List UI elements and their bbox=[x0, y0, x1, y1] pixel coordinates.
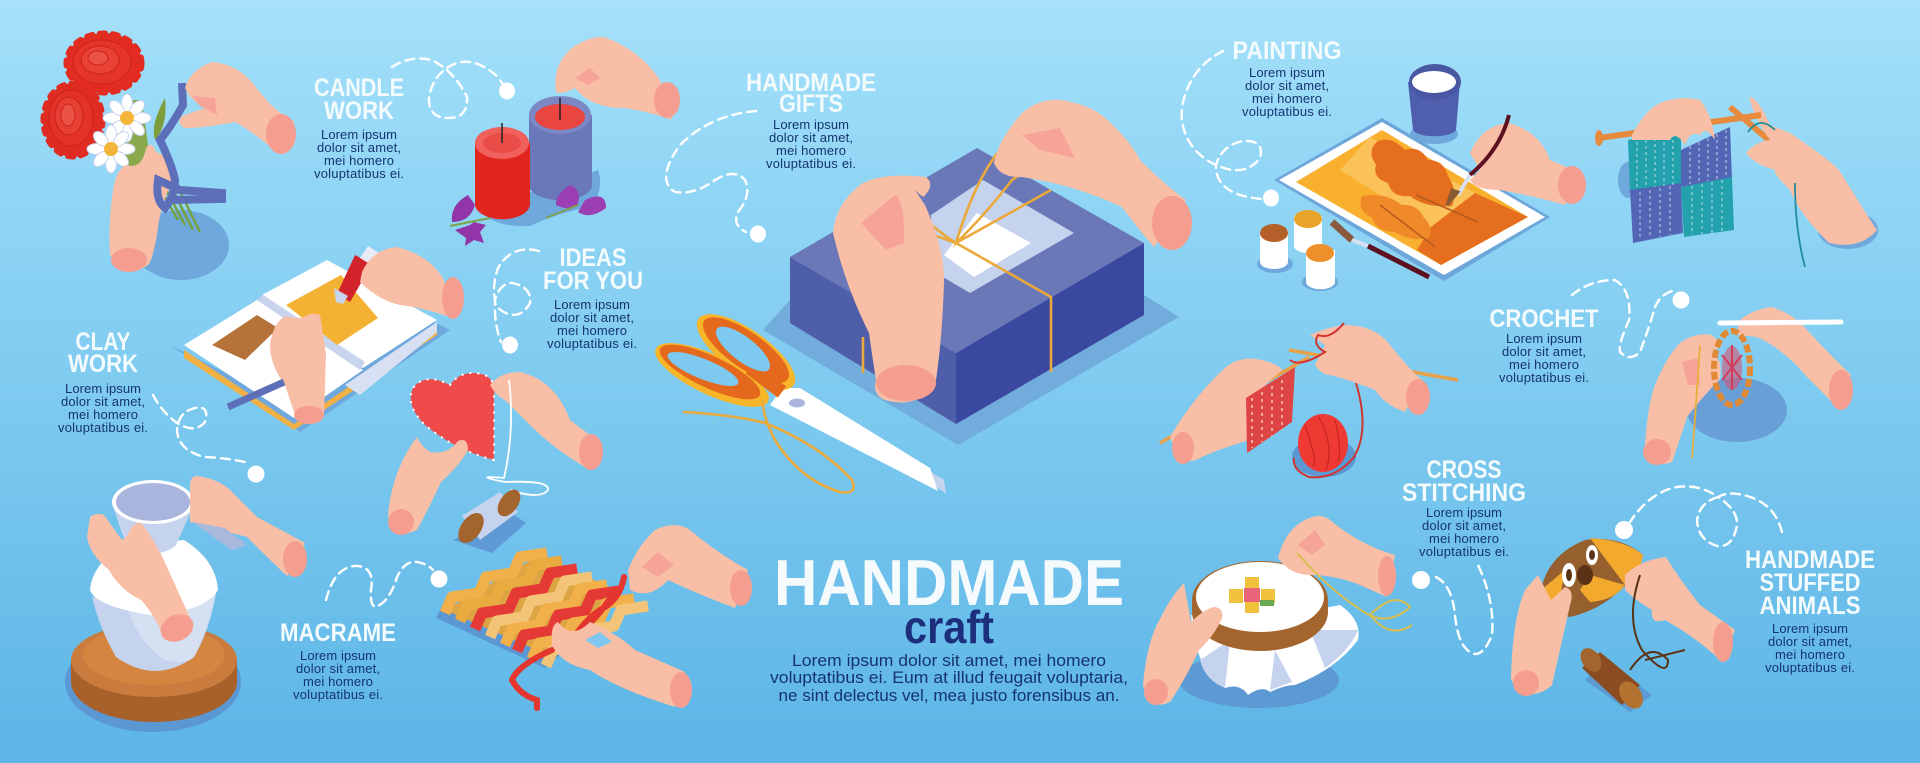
icon: small leaf bbox=[1360, 195, 1430, 239]
icon: handles bbox=[647, 301, 806, 419]
icon: box label bbox=[931, 180, 1074, 293]
hand bbox=[87, 514, 191, 640]
icon: ribbon bbox=[157, 83, 222, 208]
arrow: stuffed animals dashed bbox=[1615, 486, 1782, 546]
text block: clay work: Lorem ipsum bbox=[65, 381, 141, 396]
icon: purple flowers right bbox=[546, 185, 606, 218]
heading: ideas for you: IDEAS bbox=[560, 244, 626, 272]
heading: handmade gifts: GIFTS bbox=[779, 90, 843, 118]
text block: stuffed animals bbox=[1765, 621, 1855, 675]
text block: ideas for you: dolor sit amet, bbox=[550, 310, 634, 325]
icon: brown photo bbox=[212, 315, 278, 360]
text block: ideas for you: mei homero bbox=[557, 323, 627, 338]
icon: plush bbox=[1541, 538, 1643, 625]
icon: string bbox=[683, 400, 854, 492]
icon: red rose bbox=[66, 33, 142, 93]
heading: ideas for you: FOR YOU bbox=[543, 267, 643, 295]
heading: clay work bbox=[68, 328, 138, 378]
icon: white thread bbox=[487, 380, 548, 495]
shadow bbox=[65, 632, 241, 732]
text block: crochet: voluptatibus ei. bbox=[1499, 370, 1589, 385]
shadow bbox=[1292, 437, 1356, 477]
icon: red rose bbox=[43, 83, 103, 157]
hand bbox=[994, 100, 1186, 247]
heading: clay work: CLAY bbox=[76, 328, 131, 356]
icon: blue candle bbox=[529, 96, 592, 200]
shadow bbox=[1179, 652, 1339, 708]
text block: painting: mei homero bbox=[1252, 91, 1322, 106]
text block: stuffed animals: Lorem ipsum bbox=[1772, 621, 1848, 636]
text block: cross stitching: voluptatibus ei. bbox=[1419, 544, 1509, 559]
text block: handmade gifts: voluptatibus ei. bbox=[766, 156, 856, 171]
icon: glue stick bbox=[334, 246, 384, 304]
hand bbox=[1143, 583, 1222, 705]
icon: doily bbox=[1714, 331, 1750, 405]
icon: needles bbox=[1160, 350, 1458, 443]
hand bbox=[1645, 334, 1722, 464]
icon: string bbox=[863, 139, 1051, 373]
text block: painting bbox=[1242, 65, 1332, 119]
arrow: gifts dashed bbox=[666, 111, 766, 242]
hand bbox=[552, 622, 685, 707]
heading: crochet: CROCHET bbox=[1490, 305, 1598, 333]
icon: big leaf bbox=[1371, 140, 1454, 206]
hand bbox=[628, 525, 748, 608]
heading: clay work: WORK bbox=[68, 350, 138, 378]
icon: patchwork knit bbox=[1628, 127, 1734, 243]
hand bbox=[1511, 575, 1572, 694]
text block: clay work: voluptatibus ei. bbox=[58, 420, 148, 435]
icon: vase bbox=[90, 540, 218, 671]
text block: clay work: dolor sit amet, bbox=[61, 394, 145, 409]
heading: stuffed animals: ANIMALS bbox=[1760, 592, 1860, 620]
icon: book cover bbox=[184, 327, 437, 430]
text block: stuffed animals: dolor sit amet, bbox=[1768, 634, 1852, 649]
text block: cross stitching: dolor sit amet, bbox=[1422, 518, 1506, 533]
hand bbox=[388, 437, 468, 533]
panel: bouquet bbox=[43, 33, 296, 280]
icon: canvas bbox=[1274, 118, 1550, 281]
shadow bbox=[1687, 378, 1787, 442]
icon: green leaves bbox=[118, 100, 150, 170]
arrow: clay dashed bbox=[153, 395, 264, 482]
text block: main description: Lorem ipsum dolor sit amet, mei homero bbox=[792, 652, 1106, 670]
text block: main description: voluptatibus ei. Eum at illud feugait voluptaria, bbox=[770, 669, 1128, 687]
icon: spool bbox=[1576, 644, 1652, 713]
panel: heart sewing bbox=[388, 372, 603, 553]
text block: macrame: dolor sit amet, bbox=[296, 661, 380, 676]
panel: candles bbox=[450, 37, 680, 246]
panel: clay vase bbox=[65, 476, 307, 732]
text block: clay work bbox=[58, 381, 148, 435]
text block: stuffed animals: mei homero bbox=[1775, 647, 1845, 662]
heading: stuffed animals: STUFFED bbox=[1760, 569, 1860, 597]
text block: macrame: Lorem ipsum bbox=[300, 648, 376, 663]
hand bbox=[1170, 359, 1282, 461]
text block: macrame: voluptatibus ei. bbox=[293, 687, 383, 702]
text block: stuffed animals: voluptatibus ei. bbox=[1765, 660, 1855, 675]
icon: left page bbox=[184, 300, 363, 418]
hand bbox=[1746, 97, 1877, 245]
text block: ideas for you: voluptatibus ei. bbox=[547, 336, 637, 351]
icon: yarn bbox=[1748, 123, 1805, 267]
icon: fabric bbox=[1191, 605, 1359, 695]
text block: clay work: mei homero bbox=[68, 407, 138, 422]
hand bbox=[1738, 307, 1851, 404]
heading: candle work: CANDLE bbox=[314, 74, 404, 102]
text block: main description bbox=[770, 652, 1128, 705]
icon: stems bbox=[146, 155, 200, 232]
panel: crochet bbox=[1643, 307, 1853, 465]
text block: ideas for you bbox=[547, 297, 637, 351]
heading: craft: craft bbox=[904, 601, 994, 653]
hand bbox=[360, 247, 452, 318]
shadow bbox=[436, 600, 560, 668]
arrow: candle dashed bbox=[392, 59, 515, 118]
panel: macrame bbox=[436, 525, 752, 708]
text block: handmade gifts bbox=[766, 117, 856, 171]
text block: crochet: Lorem ipsum bbox=[1506, 331, 1582, 346]
text block: crochet bbox=[1499, 331, 1589, 385]
text block: cross stitching bbox=[1419, 505, 1509, 559]
icon: back needle bbox=[1730, 107, 1863, 220]
text block: main description: ne sint delectus vel, mea justo forensibus an. bbox=[778, 687, 1120, 705]
arrow: crochet dashed bbox=[1572, 280, 1690, 357]
arrow: macrame dashed bbox=[326, 562, 448, 607]
icon: felt heart bbox=[411, 373, 495, 460]
text block: candle work: Lorem ipsum bbox=[321, 127, 397, 142]
text block: candle work: dolor sit amet, bbox=[317, 140, 401, 155]
icon: red knit bbox=[1246, 367, 1295, 453]
hand bbox=[1632, 98, 1715, 145]
icon: pottery wheel bbox=[71, 623, 237, 722]
panel: cross stitch hoop bbox=[1143, 516, 1412, 708]
icon: spool bbox=[453, 486, 526, 553]
icon: red candle bbox=[475, 123, 530, 219]
heading: main title: HANDMADE bbox=[774, 546, 1124, 619]
arrow: ideas dashed bbox=[494, 249, 539, 354]
shadow bbox=[170, 320, 450, 432]
text block: cross stitching: mei homero bbox=[1429, 531, 1499, 546]
text block: candle work bbox=[314, 127, 404, 181]
icon: brown thread bbox=[1630, 575, 1685, 670]
icon: thread bbox=[1290, 323, 1363, 477]
panel: knitting blue bbox=[1595, 97, 1878, 267]
icon: crochet hook bbox=[1720, 322, 1841, 323]
text block: handmade gifts: mei homero bbox=[776, 143, 846, 158]
icon: woven strip bbox=[445, 553, 648, 666]
icon: yarn ball bbox=[1298, 414, 1348, 472]
icon: yarn bbox=[1692, 345, 1700, 458]
icon: front needle bbox=[1599, 115, 1761, 138]
arrow: cross stitch dashed bbox=[1412, 563, 1492, 654]
hand bbox=[190, 476, 305, 576]
icon: box bbox=[790, 148, 1144, 424]
shadow bbox=[475, 170, 600, 226]
panel: gift box bbox=[763, 100, 1192, 445]
heading: cross stitching bbox=[1402, 456, 1526, 507]
heading: ideas for you bbox=[543, 244, 643, 295]
icon: daisies bbox=[87, 94, 151, 173]
icon: hoop bbox=[1192, 561, 1328, 651]
heading: cross stitching: STITCHING bbox=[1402, 479, 1526, 507]
text block: candle work: mei homero bbox=[324, 153, 394, 168]
icon: red cord bbox=[512, 577, 624, 708]
text block: candle work: voluptatibus ei. bbox=[314, 166, 404, 181]
text block: painting: voluptatibus ei. bbox=[1242, 104, 1332, 119]
hand bbox=[109, 145, 173, 270]
icon: purple flowers left bbox=[450, 195, 490, 246]
heading: handmade gifts bbox=[746, 69, 876, 118]
icon: paint brush bbox=[1447, 115, 1509, 205]
shadow bbox=[133, 210, 229, 280]
heading: candle work bbox=[314, 74, 404, 125]
shadow bbox=[763, 295, 1179, 445]
icon: ribbon bbox=[228, 382, 284, 407]
text block: ideas for you: Lorem ipsum bbox=[554, 297, 630, 312]
heading: stuffed animals bbox=[1745, 546, 1875, 620]
text block: macrame bbox=[293, 648, 383, 702]
hand bbox=[490, 372, 603, 470]
icon: cross stitch flower bbox=[1229, 577, 1275, 613]
icon: blade bbox=[770, 388, 946, 494]
heading: macrame: MACRAME bbox=[280, 619, 396, 647]
panel: red knitting bbox=[1160, 323, 1458, 477]
text block: cross stitching: Lorem ipsum bbox=[1426, 505, 1502, 520]
hand bbox=[179, 62, 295, 148]
hand bbox=[270, 314, 326, 420]
text block: crochet: dolor sit amet, bbox=[1502, 344, 1586, 359]
shadow bbox=[1618, 162, 1638, 198]
heading: handmade gifts: HANDMADE bbox=[746, 69, 876, 97]
hand bbox=[1310, 325, 1422, 412]
hand bbox=[833, 176, 944, 402]
icon: cup rim bbox=[112, 480, 194, 553]
text block: handmade gifts: dolor sit amet, bbox=[769, 130, 853, 145]
text block: painting: dolor sit amet, bbox=[1245, 78, 1329, 93]
text block: painting: Lorem ipsum bbox=[1249, 65, 1325, 80]
text block: handmade gifts: Lorem ipsum bbox=[773, 117, 849, 132]
panel: scrapbook bbox=[170, 246, 464, 432]
heading: stuffed animals: HANDMADE bbox=[1745, 546, 1875, 574]
icon: thread bbox=[1297, 553, 1412, 631]
heading: cross stitching: CROSS bbox=[1426, 456, 1502, 484]
heading: painting: PAINTING bbox=[1232, 37, 1342, 65]
text block: crochet: mei homero bbox=[1509, 357, 1579, 372]
panel: scissors bbox=[647, 301, 946, 494]
arrow: painting dashed bbox=[1182, 51, 1279, 206]
icon: right page bbox=[262, 260, 437, 368]
heading: candle work: WORK bbox=[324, 97, 394, 125]
hand bbox=[555, 37, 672, 120]
icon: brush on table bbox=[1332, 222, 1429, 277]
hand bbox=[1470, 123, 1578, 205]
hand bbox=[1625, 557, 1735, 662]
text block: macrame: mei homero bbox=[303, 674, 373, 689]
icon: orange card bbox=[286, 275, 378, 345]
icon: water cup bbox=[1408, 64, 1461, 144]
panel: painting bbox=[1257, 64, 1586, 291]
icon: paint pots bbox=[1257, 210, 1338, 291]
panel: stuffed animal bbox=[1511, 538, 1735, 713]
hand bbox=[1278, 516, 1395, 597]
